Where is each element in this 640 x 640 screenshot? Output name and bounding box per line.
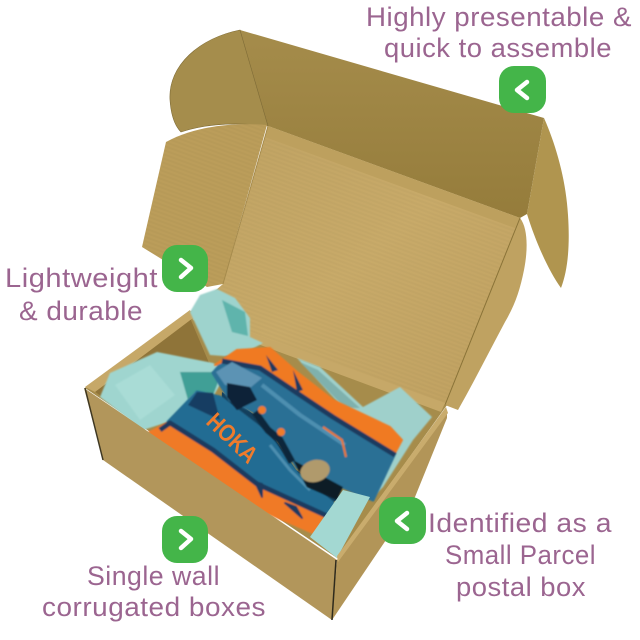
upper shoe	[213, 348, 402, 500]
tissue paper: top	[190, 289, 263, 357]
text: Identified as a: Identified as a	[428, 508, 612, 538]
callout: small parcel	[379, 497, 612, 602]
text: quick to assemble: quick to assemble	[384, 33, 612, 63]
box inner walls	[85, 310, 447, 558]
rear left tuck flap	[170, 30, 268, 132]
HOKA logo: HOKA	[201, 408, 263, 469]
callout: presentable	[366, 2, 632, 113]
box front face	[84, 388, 337, 620]
top lid flap	[240, 30, 544, 218]
icon: right chevron badge	[162, 245, 208, 292]
callout: single wall	[42, 516, 266, 622]
text: Lightweight: Lightweight	[5, 263, 158, 293]
icon: left chevron badge	[379, 497, 426, 544]
icon: right chevron badge	[162, 516, 208, 563]
text: Small Parcel: Small Parcel	[445, 540, 596, 570]
inner lid panel	[190, 126, 520, 405]
shoe insole	[298, 456, 332, 486]
gap between shoes	[220, 392, 340, 510]
box right face	[85, 388, 448, 620]
front left side flap	[142, 124, 267, 287]
lower shoe	[148, 392, 333, 533]
icon: left chevron badge	[499, 66, 546, 113]
text: corrugated boxes: corrugated boxes	[42, 592, 266, 622]
open cardboard box with shoes	[84, 30, 569, 620]
tissue paper: right	[297, 358, 432, 500]
callout: lightweight	[5, 245, 208, 326]
tissue paper: left	[100, 352, 227, 430]
front right side flap	[445, 218, 527, 410]
text: Highly presentable: Highly presentable &	[366, 2, 632, 32]
text: Single wall: Single wall	[87, 561, 220, 591]
rear right tuck flap	[527, 118, 569, 288]
text: durable: & durable	[19, 296, 143, 326]
tissue paper: front	[310, 490, 370, 558]
text: postal box: postal box	[456, 572, 586, 602]
